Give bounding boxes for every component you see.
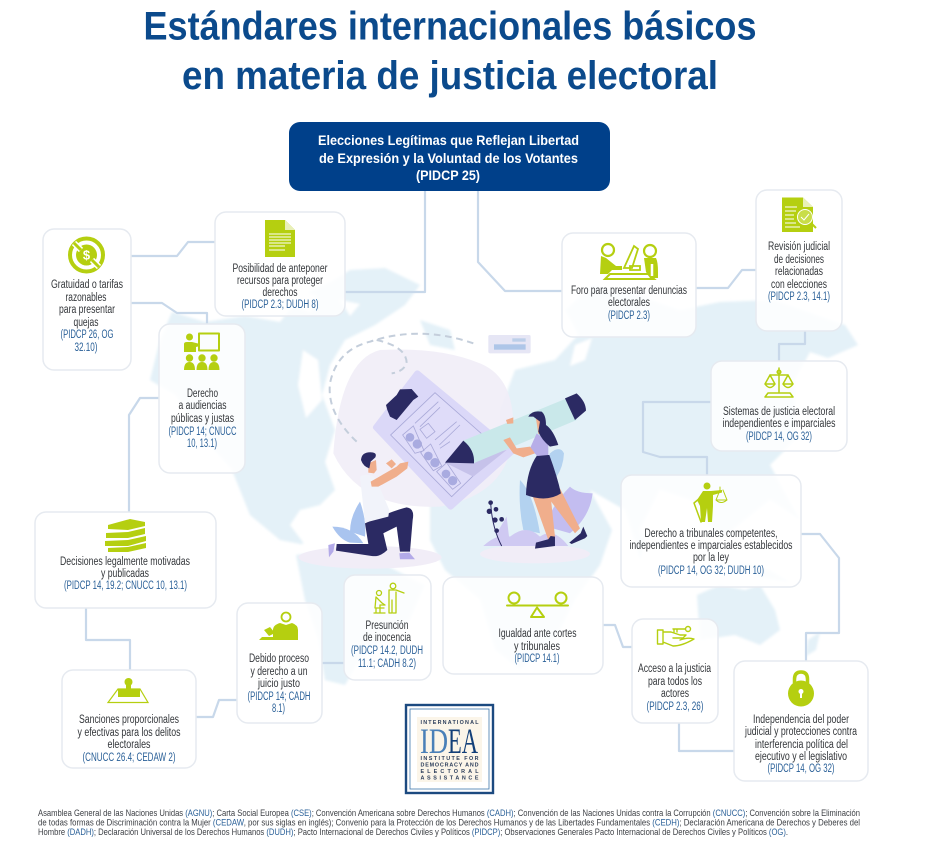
icon: two people at desk <box>600 244 658 279</box>
label: Debido proceso <box>249 653 309 665</box>
label <box>744 714 857 775</box>
header box <box>289 122 610 191</box>
label: Sanciones proporcionales <box>79 714 179 726</box>
label: de inocencia <box>363 632 411 644</box>
label: Foro para presentar denuncias <box>571 285 687 297</box>
label: (PIDCP 14.1) <box>514 653 560 665</box>
icon: audience <box>184 334 220 370</box>
logo: International IDEA: INTERNATIONAL <box>420 720 479 726</box>
logo: International IDEA: ID <box>420 721 448 761</box>
icon: no fee <box>70 238 103 272</box>
label: (PIDCP 14, OG 32; DUDH 10) <box>658 565 764 577</box>
label: Gratuidad o tarifas <box>51 279 123 291</box>
connector: independencia to tribunales <box>801 534 839 661</box>
footnote: list of acronyms: Hombre (DADH); Declaración Universal de los Derechos Humanos (DUDH); Pacto Internacional de Derechos Civiles y Políticos (PIDCP); Observaciones Generales Pacto Internacional de Derechos Civiles y Políticos (OG). <box>38 827 788 837</box>
label <box>232 263 328 311</box>
label <box>630 528 793 577</box>
label: a audiencias <box>178 400 227 412</box>
ballot sheet <box>376 373 512 507</box>
label: Acceso a la justicia <box>638 663 711 675</box>
label: y tribunales <box>514 641 560 653</box>
card: foro <box>562 233 696 337</box>
clipboard clip <box>386 389 418 420</box>
card: acceso <box>632 619 718 723</box>
label: electorales <box>108 739 151 751</box>
logo: International IDEA: EA <box>448 721 478 761</box>
label: Igualdad ante cortes <box>498 628 577 640</box>
connector: gratuidad to recursos <box>131 242 215 256</box>
card: audiencias <box>159 324 245 473</box>
label: electorales <box>608 297 650 309</box>
label: (PIDCP 2.3) <box>608 310 650 322</box>
central illustration <box>298 334 593 569</box>
footnote: list of acronyms: Asamblea General de las Naciones Unidas (AGNU); Carta Social Europea (CSE); Convención Americana sobre Derechos Humanos (CADH); Convención de las Naciones Unidas contra la Corrupción (CNUCC); Convención sobre la Eliminación <box>38 808 860 818</box>
card: gratuidad <box>43 229 131 370</box>
footnote: list of acronyms <box>38 808 860 837</box>
pencil <box>445 393 586 477</box>
label: (PIDCP 14, 19.2; CNUCC 10, 13.1) <box>64 580 187 592</box>
label: Sistemas de justicia electoral <box>723 406 835 418</box>
label <box>78 714 181 764</box>
connector: gratuidad to audiencias <box>131 303 207 324</box>
label: y derecho a un <box>250 666 308 678</box>
label: (CNUCC 26.4; CEDAW 2) <box>82 752 176 764</box>
label: y publicadas <box>101 568 149 580</box>
connector: header to foro card <box>478 191 562 291</box>
label: 8.1) <box>272 703 285 715</box>
label: de decisiones <box>774 254 824 266</box>
icon: no fee: $ <box>83 248 91 262</box>
label: razonables <box>66 292 107 304</box>
label: (PIDCP 14.2, DUDH <box>351 645 423 657</box>
icon: hand with key <box>658 626 694 646</box>
logo: International IDEA <box>406 705 493 793</box>
card: decisiones <box>35 512 216 608</box>
header box: (PIDCP 25) <box>416 168 480 183</box>
label <box>571 285 687 322</box>
lilac backdrop blob <box>333 349 513 507</box>
title <box>144 4 756 98</box>
label: Derecho a tribunales competentes, <box>644 528 778 540</box>
header box: de Expresión y la Voluntad de los Votantes <box>319 151 578 166</box>
label: Independencia del poder <box>753 714 849 726</box>
icon: judge and gavel <box>259 612 298 640</box>
label: juicio justo <box>257 678 300 690</box>
label: (PIDCP 2.3, 14.1) <box>768 291 830 303</box>
label: 11.1; CADH 8.2) <box>358 658 416 670</box>
label <box>168 388 236 450</box>
label <box>768 241 830 303</box>
label: públicas y justas <box>171 413 234 425</box>
ground shadows <box>298 545 590 569</box>
label <box>498 628 577 665</box>
logo: International IDEA: ASSISTANCE <box>420 776 479 782</box>
connector: igualdad to acceso <box>603 625 632 647</box>
dashed globe arc <box>330 334 473 442</box>
card: igualdad <box>443 577 603 674</box>
card: revisión <box>756 190 842 331</box>
label: con elecciones <box>771 279 827 291</box>
connector: audiencias to decisiones <box>129 398 159 512</box>
label <box>638 663 711 713</box>
icon: padlock <box>788 672 814 706</box>
icon: two figures <box>374 583 404 613</box>
label: ejecutivo y el legislativo <box>755 751 847 763</box>
title: en materia de justicia electoral <box>182 54 718 98</box>
label: (PIDCP 14, OG 32) <box>768 763 835 775</box>
card: presunción <box>344 575 431 680</box>
label: quejas <box>74 317 99 329</box>
label: independientes e imparciales <box>722 418 836 430</box>
label: Revisión judicial <box>768 241 830 253</box>
label: independientes e imparciales establecidos <box>630 540 793 552</box>
icon: scales <box>765 368 793 397</box>
label: para todos los <box>648 676 702 688</box>
connector: acceso to independencia <box>679 723 734 751</box>
card: sanciones <box>62 670 196 768</box>
icon: seesaw <box>507 592 568 617</box>
icon: lady justice <box>694 482 727 522</box>
label <box>722 406 836 443</box>
label: (PIDCP 2.3; DUDH 8) <box>242 299 319 311</box>
label <box>51 279 123 354</box>
logo: International IDEA: INSTITUTE FOR <box>420 756 479 762</box>
card: independencia <box>734 661 868 781</box>
label: 10, 13.1) <box>187 438 217 450</box>
plants behind figures <box>332 449 593 546</box>
label: por la ley <box>693 552 729 564</box>
label: Decisiones legalmente motivadas <box>60 556 190 568</box>
connector: decisiones to sanciones <box>86 608 130 670</box>
icon: document <box>265 220 295 257</box>
label: relacionadas <box>775 266 823 278</box>
icon: document with magnifier <box>782 198 816 232</box>
label: judicial y protecciones contra <box>744 726 857 738</box>
label: para presentar <box>59 304 115 316</box>
card: tribunales <box>621 475 801 587</box>
label: recursos para proteger <box>237 275 323 287</box>
man kneeling <box>328 452 415 559</box>
label: actores <box>661 688 689 700</box>
connector: header to recursos card <box>345 191 425 292</box>
connector: sanciones to debido proceso <box>196 700 237 717</box>
label: (PIDCP 14, OG 32) <box>746 431 812 443</box>
label <box>60 556 190 592</box>
connectors between cards <box>86 191 839 751</box>
world map background <box>150 268 858 685</box>
connector: debido proceso to presunción <box>322 662 344 664</box>
card: sistemas <box>711 361 847 451</box>
logo: International IDEA: DEMOCRACY AND <box>420 762 479 768</box>
label: Derecho <box>187 388 218 400</box>
label: (PIDCP 26, OG <box>60 329 114 341</box>
label: interferencia política del <box>755 739 848 751</box>
label <box>351 620 423 670</box>
label: y efectivas para los delitos <box>78 727 181 739</box>
label: (PIDCP 14; CADH <box>248 691 310 703</box>
label: Posibilidad de anteponer <box>232 263 328 275</box>
connector: foro to revisión <box>696 270 756 288</box>
label: (PIDCP 2.3, 26) <box>646 701 704 713</box>
title: Estándares internacionales básicos <box>144 4 756 48</box>
icon: stamp <box>108 678 148 702</box>
label: (PIDCP 14; CNUCC <box>168 426 236 438</box>
connector: sistemas to revisión <box>779 331 805 361</box>
label: derechos <box>262 287 298 299</box>
header box: Elecciones Legítimas que Reflejan Libertad <box>318 133 579 148</box>
label: 32.10) <box>74 342 98 354</box>
logo: International IDEA: ELECTORAL <box>420 769 479 775</box>
icon: books <box>105 519 146 552</box>
label: Presunción <box>366 620 408 632</box>
connector: tribunales to sistemas <box>643 402 711 475</box>
card: debido proceso <box>237 603 322 723</box>
card: recursos <box>215 212 345 316</box>
label <box>248 653 310 715</box>
small card <box>488 335 531 353</box>
woman standing <box>503 411 587 549</box>
footnote: list of acronyms: de todas formas de Discriminación contra la Mujer (CEDAW, por sus siglas en inglés); Convenio para la Protección de los Derechos Humanos y de las Libertades Fundamentales (CEDH); Declaración Americana de Derechos y Deberes del <box>38 818 860 828</box>
